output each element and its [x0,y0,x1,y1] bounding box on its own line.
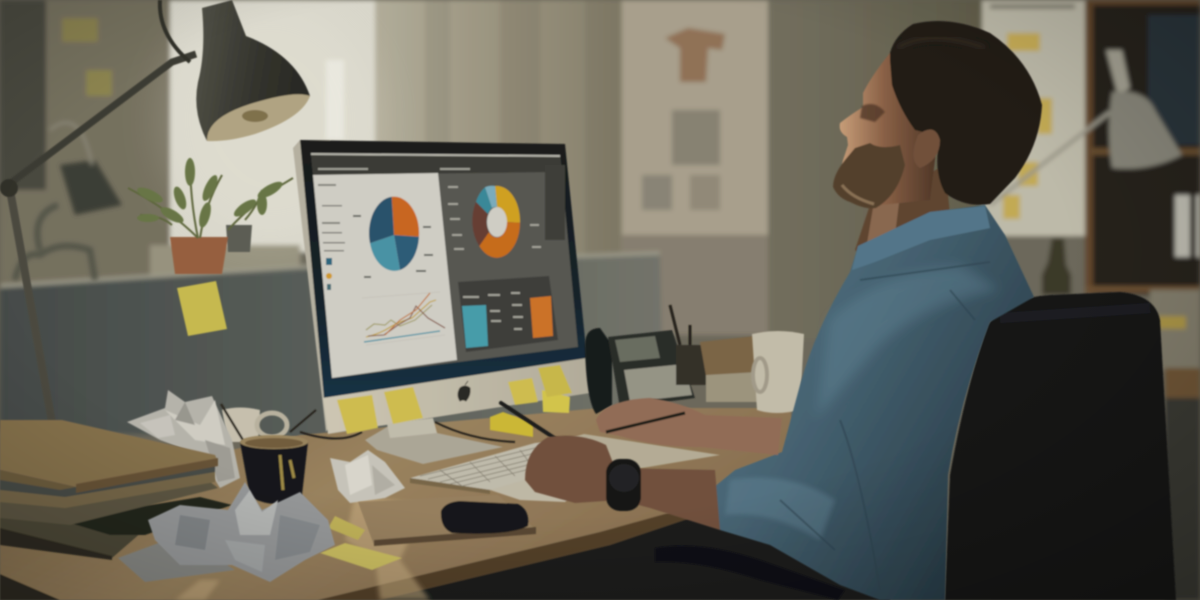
stacked papers [700,336,758,376]
whiteboard with notes [982,0,1086,236]
head and face [838,53,940,205]
wall left [0,0,175,290]
upper forearm and hand [596,398,782,455]
crumpled paper behind books [127,390,240,488]
bookshelf with binders [1085,0,1200,295]
neck [855,165,950,262]
toolbar [311,153,561,175]
window sill [150,245,300,280]
shirt collar [852,206,990,270]
desk front edge [318,498,726,600]
donut chart [472,186,520,258]
eye shadow [860,104,885,122]
phone on desk [585,305,758,414]
watch [606,459,641,511]
bottle [1042,238,1071,295]
black bezel [300,140,587,398]
lower forearm and hand [525,436,720,530]
desk right and papers [1150,290,1200,600]
stack of books and folders [0,420,232,560]
line chart [362,292,445,345]
lamp right [990,50,1182,205]
shirt body [708,205,1034,600]
chair back [945,292,1176,600]
cubicle partition [0,251,662,440]
desk lamp left [0,0,310,422]
hair [890,21,1042,205]
white mug right [752,331,804,413]
chair arm [655,546,845,600]
crumpled paper center [330,450,405,503]
sticky notes on monitor [337,365,572,434]
desk surface [0,408,890,600]
beard [833,143,905,208]
small background lamp [15,123,122,280]
pen in hand [606,413,685,432]
sidebar text lines [318,184,345,252]
shirt highlight [815,265,1000,420]
sticky notes on desk [320,516,402,570]
man [525,21,1042,600]
pinboard left [0,0,46,190]
notebook with wallet [358,495,536,546]
apple logo [458,381,470,401]
dark area under desk [380,506,890,600]
window light [170,0,375,252]
curtain [375,0,625,260]
sticky notes on wall left [62,18,112,96]
monitor chin [323,358,590,434]
right wall [768,0,988,340]
pen holder [670,305,690,350]
white report page [313,173,457,378]
black coffee mug [240,435,308,504]
keyboard and notepad [410,434,720,502]
screen dark area [311,153,578,378]
pencil over keyboard [501,403,562,443]
sticky note on partition [177,281,227,336]
stand [365,420,503,464]
sun patches on desk [345,495,430,600]
window glow [160,0,380,240]
back cables [290,410,515,442]
lamp underside [207,94,310,141]
donut labels [448,186,541,250]
silver back edge [293,140,345,432]
ear [913,130,940,168]
large crumpled paper [118,482,335,582]
poster on wall [622,0,770,335]
pie chart [369,197,419,271]
back white cup [221,404,287,445]
monitor [293,140,590,464]
dashboard cards [458,276,558,352]
pie labels [353,215,433,278]
yellow note block [490,412,533,437]
plant in pots [128,158,293,274]
